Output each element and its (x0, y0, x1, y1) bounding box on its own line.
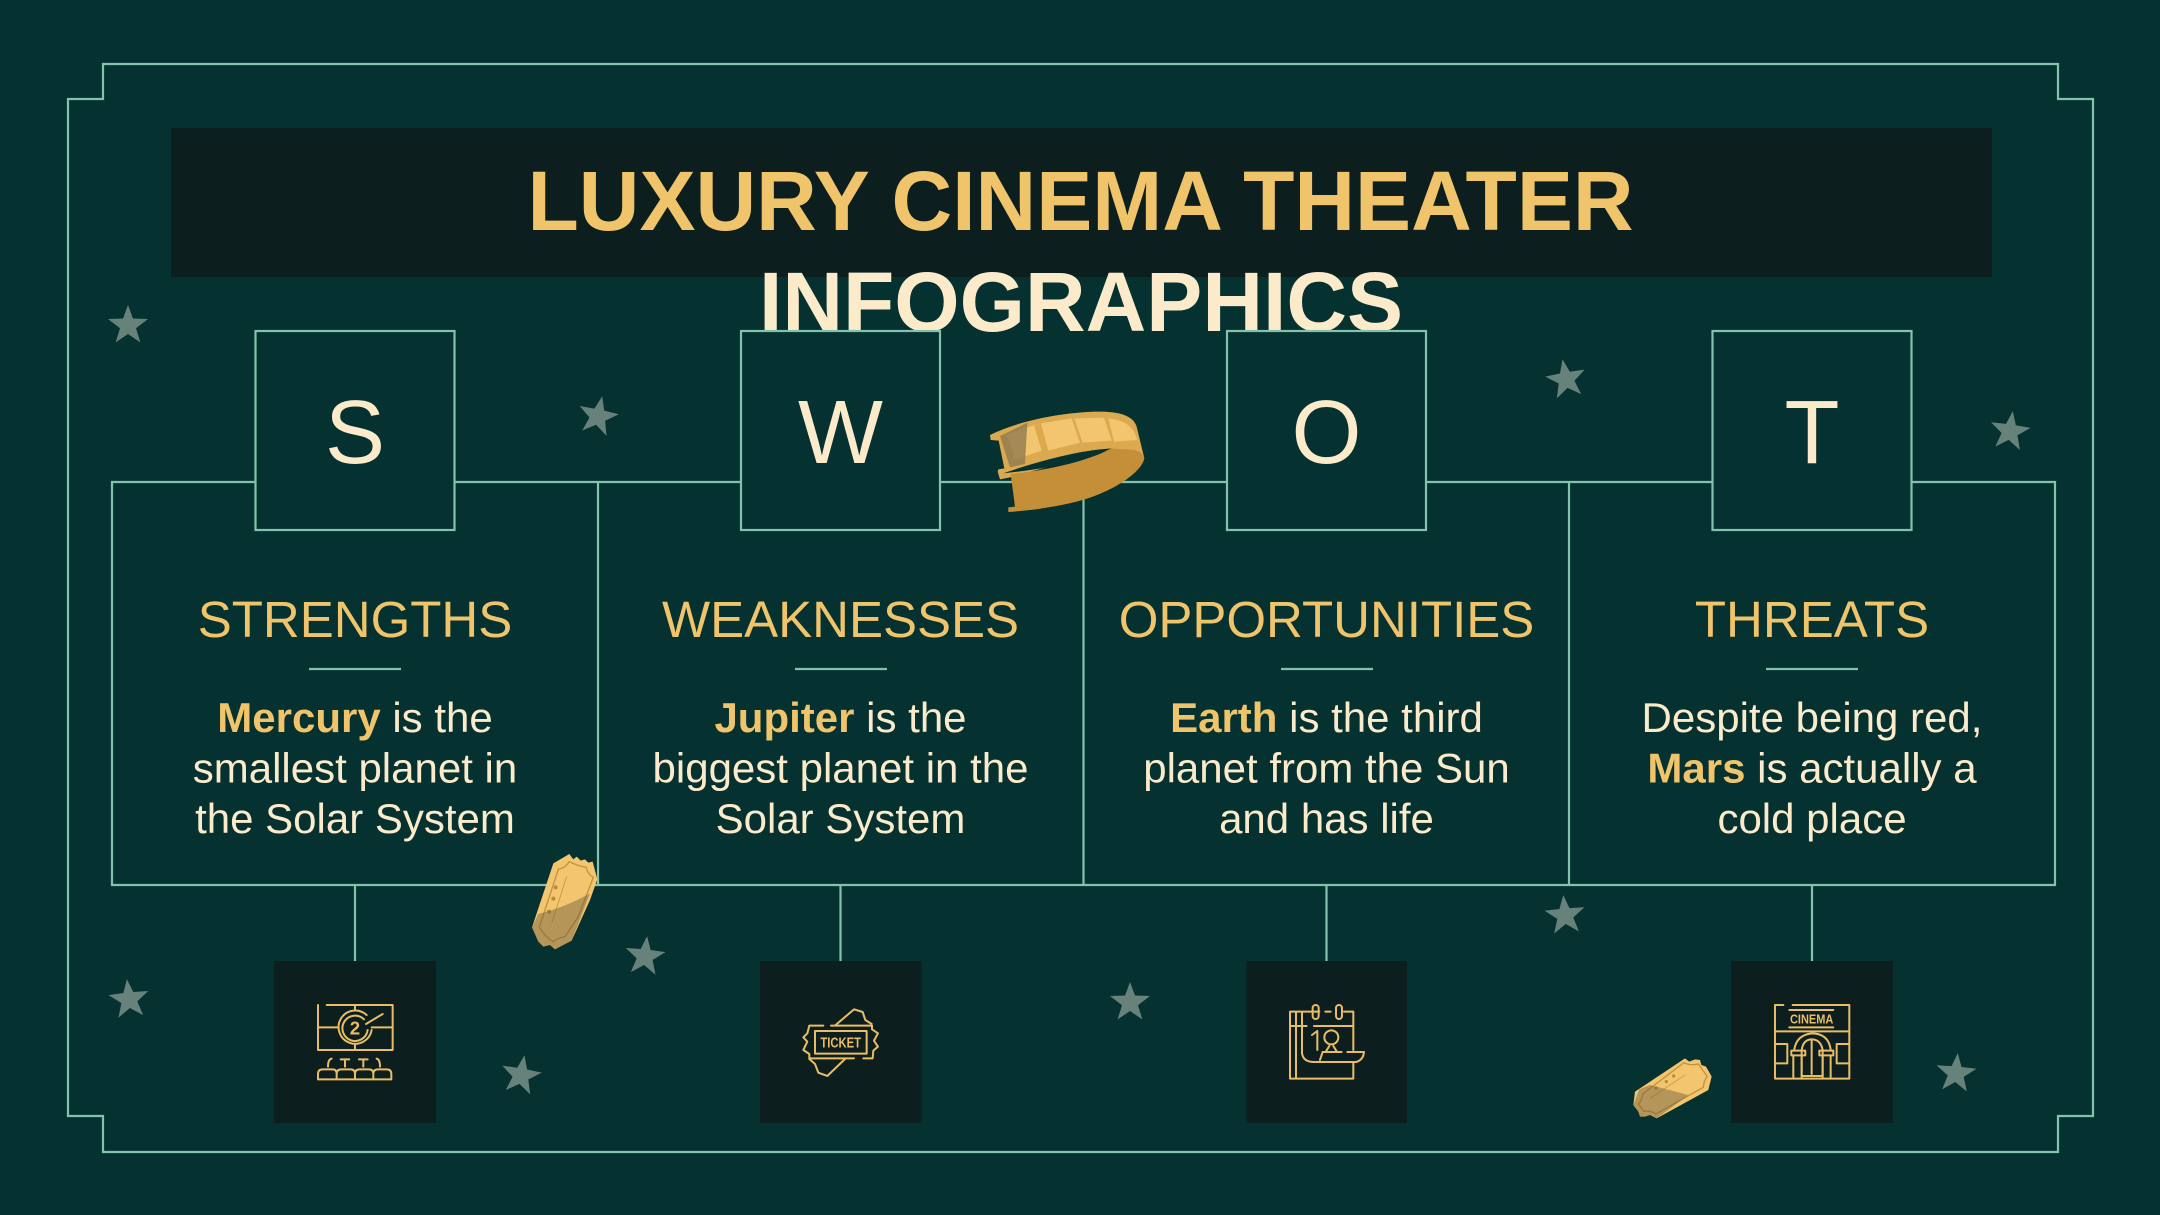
letter S: S (325, 383, 385, 483)
heading opportunities: OPPORTUNITIES (1119, 591, 1534, 648)
body opportunities: Earth is the third (1170, 694, 1483, 741)
letter box S (256, 331, 454, 530)
icon: cinema screen with seats: 2 (350, 1017, 360, 1038)
icon box: screen and seats (274, 961, 436, 1123)
column: strengths (193, 331, 517, 842)
title band (171, 128, 1992, 277)
icon box: cinema building (1731, 961, 1893, 1123)
icon box: ticket (760, 961, 922, 1123)
underline (795, 668, 887, 670)
column: opportunities (1119, 331, 1534, 842)
letter box W (741, 331, 940, 530)
body opportunities: planet from the Sun (1143, 744, 1510, 792)
heading strengths: STRENGTHS (198, 591, 512, 648)
icon: cinema building (1775, 1005, 1849, 1079)
underline (1281, 668, 1373, 670)
column: threats (1642, 331, 1982, 842)
column: weaknesses (653, 331, 1028, 842)
ticket: upper left (532, 854, 597, 949)
letter W: W (798, 383, 883, 483)
body threats: Mars is actually a (1647, 744, 1977, 792)
letter T: T (1785, 383, 1839, 483)
body weaknesses: biggest planet in the (653, 744, 1028, 792)
heading weaknesses: WEAKNESSES (662, 591, 1019, 648)
connectors to icons (355, 885, 1812, 961)
body weaknesses: Jupiter is the (714, 694, 967, 741)
body opportunities: and has life (1219, 795, 1434, 842)
icon: cinema screen with seats (318, 1005, 393, 1079)
SWOT table grid (112, 482, 2055, 885)
title: LUXURY CINEMA THEATER (527, 154, 1634, 248)
title: INFOGRAPHICS (759, 255, 1403, 349)
letter box T (1712, 331, 1912, 530)
body strengths: smallest planet in (193, 744, 517, 792)
body threats: cold place (1717, 795, 1907, 842)
icon: tickets: TICKET (820, 1036, 861, 1052)
underline (309, 668, 401, 670)
icon: calendar with ticket clerk (1290, 1005, 1364, 1079)
underline (1766, 668, 1858, 670)
film reel (990, 412, 1144, 512)
title (527, 154, 1634, 349)
ticket: lower right (1633, 1058, 1712, 1118)
letter box O (1227, 331, 1426, 530)
stars (107, 305, 2033, 1096)
heading threats: THREATS (1695, 591, 1929, 648)
body strengths: the Solar System (195, 795, 515, 842)
body weaknesses: Solar System (716, 795, 965, 842)
icon box: calendar (1246, 961, 1407, 1123)
body threats: Despite being red, (1642, 694, 1982, 741)
icon: cinema building: CINEMA (1790, 1012, 1834, 1027)
body strengths: Mercury is the (217, 694, 493, 741)
icon: tickets (803, 1009, 878, 1076)
letter O: O (1291, 383, 1362, 483)
